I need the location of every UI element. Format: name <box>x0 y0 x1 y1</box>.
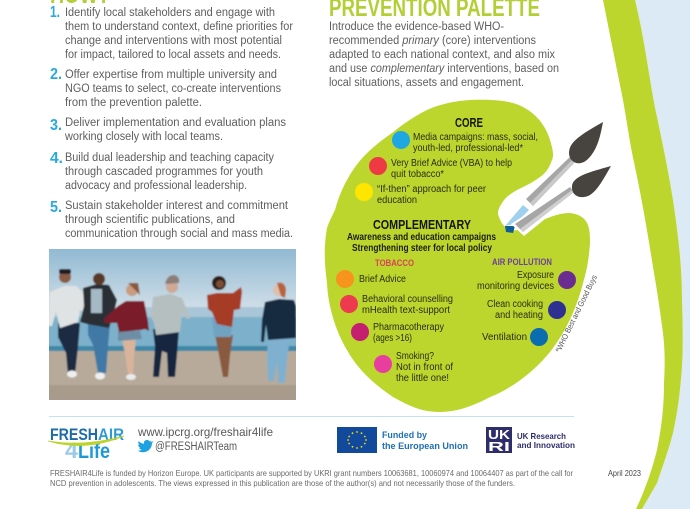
tobacco: smoking: Not in front of <box>396 362 453 373</box>
air pollution column: AIR POLLUTION <box>492 257 552 268</box>
tobacco: smoking <box>374 351 453 384</box>
step 1: for impact, tailored to local assets and needs. <box>65 49 281 61</box>
painter's palette <box>325 100 590 412</box>
logo: FRESHAIR4Life: 4 <box>65 438 79 463</box>
logo: funded by the European Union <box>337 427 468 453</box>
logo: funded by the European Union: Funded by <box>382 430 428 441</box>
tobacco: smoking: Smoking? <box>396 351 434 362</box>
core: if-then approach <box>355 183 487 206</box>
air: exposure monitoring <box>477 270 576 292</box>
website and twitter handle: @FRESHAIRTeam <box>155 441 237 453</box>
step 1: change and interventions with most potential <box>65 35 282 47</box>
website and twitter handle: www.ipcrg.org/freshair4life <box>137 425 273 439</box>
complementary section heading <box>347 217 496 254</box>
core: very brief advice: quit tobacco* <box>391 169 444 180</box>
tobacco: behavioral counselling: mHealth text-support <box>362 305 450 316</box>
core: if-then approach: “If-then” approach for peer <box>377 184 487 195</box>
step 3: 3. <box>50 117 62 134</box>
step 1: them to understand context, define priorities for <box>65 21 293 33</box>
step 4 <box>50 150 274 192</box>
logo: UK Research and Innovation: UK Research <box>517 431 566 441</box>
date: April 2023 <box>608 468 641 478</box>
air: exposure monitoring: Exposure <box>517 270 554 281</box>
intro paragraph: local situations, assets and engagement. <box>329 77 524 89</box>
complementary section heading: Strengthening steer for local policy <box>352 243 492 254</box>
tobacco: pharmacotherapy: Pharmacotherapy <box>373 322 444 333</box>
logo: UK Research and Innovation: UK <box>488 427 511 442</box>
logo: FRESHAIR4Life: Life <box>78 440 110 463</box>
icon: two paint brushes <box>505 122 611 236</box>
icon: bird <box>138 440 154 452</box>
core: very brief advice: Very Brief Advice (VBA) to help <box>391 158 512 169</box>
complementary section heading: COMPLEMENTARY <box>373 217 471 232</box>
funding disclaimer <box>50 468 573 488</box>
step 2: NGO teams to select, co-create interventions <box>65 83 281 95</box>
step 2: from the prevention palette. <box>65 97 202 109</box>
intro paragraph: recommended primary (core) interventions <box>329 35 536 47</box>
palette shape <box>325 100 590 412</box>
air: clean cooking: Clean cooking <box>487 299 543 310</box>
step 4: Build dual leadership and teaching capacity <box>65 152 274 164</box>
tobacco: behavioral counselling <box>340 294 453 316</box>
core: media campaigns: youth-led, professional-led* <box>413 143 523 154</box>
logo: funded by the European Union: the European Union <box>382 441 468 452</box>
air: clean cooking: and heating <box>495 310 543 321</box>
logo: UK Research and Innovation: RI <box>488 439 510 454</box>
step 4: advocacy and professional leadership. <box>65 180 247 192</box>
funding disclaimer: FRESHAIR4Life is funded by Horizon Europe. UK participants are supported by UKRI grant numbers 10063681, 10060974 and 10064407 as part of the call for <box>50 468 573 478</box>
core section <box>355 115 538 206</box>
air: exposure monitoring: monitoring devices <box>477 281 554 292</box>
photo: young people walking on a beach <box>45 245 300 404</box>
tobacco: pharmacotherapy <box>351 322 444 344</box>
logo: FRESHAIR4Life <box>48 425 124 463</box>
right side band: green swoosh <box>603 0 683 509</box>
step 5: communication through social and mass media. <box>65 228 293 240</box>
numbered list of steps <box>50 4 293 240</box>
tobacco column: TOBACCO <box>375 258 414 269</box>
air pollution column <box>477 257 576 346</box>
tobacco: pharmacotherapy: (ages >16) <box>373 333 412 344</box>
funding disclaimer: NCD prevention in adolescents. The views expressed in this publication are those of the author(s) and not necessarily those of the funders. <box>50 478 515 488</box>
step 3: working closely with local teams. <box>64 131 223 143</box>
step 3: Deliver implementation and evaluation plans <box>65 117 286 129</box>
step 4: through cascaded programmes for youth <box>65 166 263 178</box>
step 5: Sustain stakeholder interest and commitment <box>65 200 289 212</box>
intro paragraph <box>329 21 559 89</box>
logo: FRESHAIR4Life: AIR <box>98 425 124 444</box>
tobacco: smoking: the little one! <box>396 373 449 384</box>
intro paragraph: and use complementary interventions, based on <box>329 63 559 75</box>
logo: UK Research and Innovation: and Innovation <box>517 440 575 450</box>
complementary section heading: Awareness and education campaigns <box>347 232 496 243</box>
step 1: 1. <box>50 4 60 21</box>
right side band: light blue background <box>635 0 690 509</box>
rotated footnote: *WHO Best and Good Buys <box>554 274 599 354</box>
tobacco column <box>336 258 453 384</box>
logo: UK Research and Innovation <box>486 427 575 454</box>
core: if-then approach: education <box>377 195 417 206</box>
logo: FRESHAIR4Life: FRESH <box>50 425 98 444</box>
step 5: 5. <box>50 199 62 216</box>
tobacco: brief advice: Brief Advice <box>359 274 406 285</box>
step 5: through scientific publications, and <box>65 214 235 226</box>
step 2: 2. <box>50 66 62 83</box>
step 1 <box>50 4 293 61</box>
intro paragraph: Introduce the evidence-based WHO- <box>329 21 504 33</box>
tobacco: behavioral counselling: Behavioral counselling <box>362 294 453 305</box>
core: very brief advice <box>369 157 512 180</box>
air: clean cooking <box>487 299 566 321</box>
intro paragraph: adapted to each national context, and also mix <box>329 49 555 61</box>
step 2: Offer expertise from multiple university and <box>65 69 277 81</box>
core: media campaigns: Media campaigns: mass, social, <box>413 132 538 143</box>
core: media campaigns <box>392 131 538 154</box>
step 2 <box>50 66 281 109</box>
air: ventilation: Ventilation <box>482 332 527 343</box>
step 4: 4. <box>50 150 63 167</box>
step 5 <box>50 199 293 240</box>
step 1: Identify local stakeholders and engage with <box>65 7 275 19</box>
website and twitter handle <box>137 425 273 453</box>
core section: CORE <box>455 115 483 130</box>
step 3 <box>50 117 286 143</box>
